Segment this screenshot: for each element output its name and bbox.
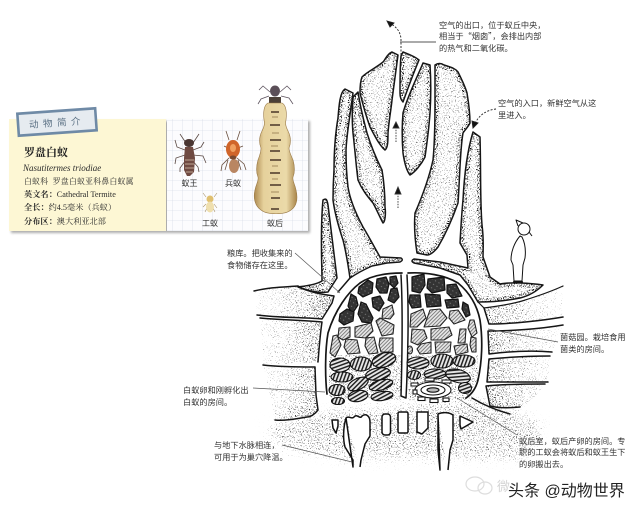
- icon: soldier termite: [221, 131, 246, 173]
- tag: animal profile: 动物简介: [29, 115, 85, 131]
- callout: fungus garden: 菌类的房间。: [560, 344, 609, 354]
- callout: air exit: 相当于“烟囱”，会排出内部: [439, 30, 541, 42]
- distribution: 分布区：澳大利亚北部: [24, 216, 106, 226]
- icon: human figure for scale: [511, 220, 532, 282]
- callout: food store: 粮库。把收集来的: [227, 249, 293, 258]
- panel: card text background: [9, 119, 166, 231]
- illustration: termite mound cross-section: [254, 52, 563, 470]
- icon: queen termite: [254, 86, 297, 214]
- callout: fungus garden: 菌菇园。栽培食用: [560, 333, 626, 342]
- icon: worker termite: [203, 193, 217, 212]
- mound outlines: [298, 52, 543, 302]
- callout: queen chamber: 蚁后室，蚁后产卵的房间。专: [519, 437, 625, 446]
- label: queen: 蚁后: [267, 218, 283, 228]
- soil plate outlines: [254, 278, 563, 420]
- label: king: 蚁王: [182, 178, 198, 188]
- arrow: air entrance: [472, 109, 496, 128]
- callout: air exit: 的热气和二氧化碳。: [439, 43, 513, 53]
- callout: groundwater: 与地下水脉相连，: [214, 441, 280, 450]
- watermark: 头条 @动物世界: [508, 482, 625, 500]
- english name: 英文名：Cathedral Termite: [24, 189, 116, 199]
- callout: eggs: 白蚁的房间。: [183, 397, 232, 407]
- icon: king termite: [175, 134, 206, 176]
- watermark: [466, 477, 625, 500]
- latin name: Nasutitermes triodiae: [22, 163, 101, 173]
- egg and hatchling cells: striped: [329, 350, 475, 404]
- callout: eggs: 白蚁卵和刚孵化出: [183, 386, 249, 395]
- queen chamber: [413, 382, 451, 402]
- panel: insect grid background: [167, 119, 308, 231]
- tag: animal profile: [17, 108, 97, 136]
- arrow: air exit: [387, 21, 401, 55]
- callout: air entrance: 里进入。: [498, 111, 531, 120]
- fungus storage cells: dark: [339, 274, 470, 325]
- mound stipple fill: [298, 52, 543, 400]
- callout: air entrance: 空气的入口，新鲜空气从这: [498, 99, 596, 108]
- soil stipple: lower ground: [254, 286, 563, 462]
- watermark: 微: [497, 479, 510, 494]
- callout: food store: 食物储存在这里。: [227, 260, 293, 270]
- label: soldier: 兵蚁: [225, 178, 241, 188]
- nest interior background: [326, 273, 482, 398]
- callout: groundwater: 可用于为巢穴降温。: [214, 452, 288, 462]
- nest capsule walls: [326, 273, 482, 398]
- panel: animal profile card: [9, 108, 310, 233]
- leader lines: [253, 42, 558, 462]
- callout: air exit: 空气的出口，位于蚁丘中央，: [439, 21, 545, 30]
- callout: queen chamber: 职的工蚁会将蚁后和蚁王生下: [519, 447, 625, 457]
- label: worker: 工蚁: [202, 218, 218, 228]
- icon: faint chat bubbles: [466, 477, 492, 494]
- arrow: air rising: [393, 122, 401, 209]
- water tubes and lower chambers: [332, 412, 473, 470]
- callout: queen chamber: 的卵搬出去。: [519, 459, 568, 469]
- heading: species name: 罗盘白蚁: [24, 145, 68, 159]
- fungus garden cells: hatched: [330, 305, 477, 357]
- taxonomy: 白蚁科 罗盘白蚁亚科鼻白蚁属: [24, 176, 134, 186]
- body length: 全长：约4.5毫米（兵蚁）: [24, 202, 116, 212]
